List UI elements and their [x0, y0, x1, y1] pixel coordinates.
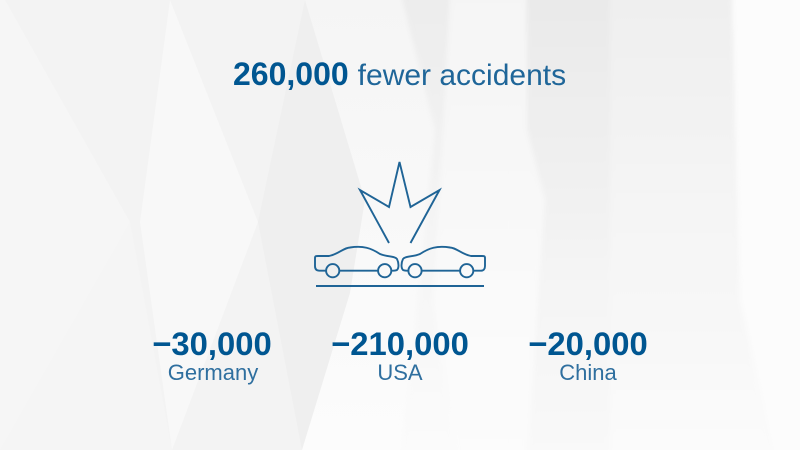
title: 260,000 fewer accidents [233, 56, 566, 92]
icon: left car [315, 247, 398, 277]
label: China [559, 360, 617, 385]
stat: USA [331, 325, 469, 385]
value: −30,000 [152, 325, 272, 362]
label: USA [377, 360, 423, 385]
stat: China [528, 325, 648, 385]
stat: Germany [152, 325, 272, 385]
left light facets [0, 0, 130, 450]
icon: right car [402, 247, 485, 277]
label: Germany [168, 360, 258, 385]
value: −210,000 [331, 325, 469, 362]
right facets [433, 0, 545, 450]
icon: impact burst [360, 162, 440, 243]
icon: road line [316, 285, 484, 287]
centre dark facet [258, 0, 365, 450]
value: −20,000 [528, 325, 648, 362]
